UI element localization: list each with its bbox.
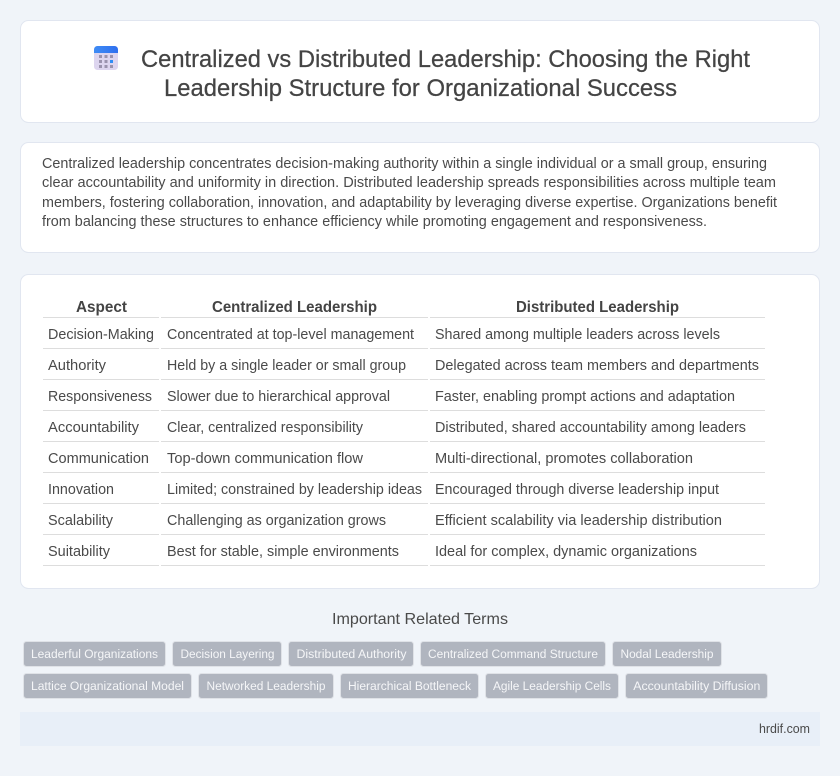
panel: introduction bbox=[20, 142, 820, 252]
row: responsiveness: Slower due to hierarchical approval bbox=[167, 389, 390, 405]
row: authority bbox=[48, 358, 759, 374]
row: accountability bbox=[48, 420, 746, 436]
row: scalability bbox=[48, 513, 722, 529]
title: Centralized vs Distributed Leadership: Choosing the Right bbox=[141, 46, 750, 73]
tag: centralized command structure bbox=[420, 642, 606, 666]
row: scalability: Scalability bbox=[48, 513, 114, 529]
tag: centralized command structure: Centralized Command Structure bbox=[428, 647, 598, 661]
text block: introduction bbox=[42, 156, 777, 230]
row: authority: Held by a single leader or small group bbox=[167, 358, 406, 374]
row: communication: Communication bbox=[48, 451, 149, 467]
row: responsiveness: Responsiveness bbox=[48, 389, 152, 405]
tags: related terms bbox=[24, 642, 768, 698]
tag: lattice organizational model bbox=[24, 674, 192, 698]
table header row bbox=[76, 299, 679, 316]
row: communication bbox=[48, 451, 693, 467]
table header row: Distributed Leadership bbox=[516, 299, 679, 316]
row: accountability: Clear, centralized responsibility bbox=[167, 420, 364, 436]
row: responsiveness bbox=[48, 389, 735, 405]
text block: introduction: members, fostering collaboration, innovation, and adaptability by leveraging diverse expertise. Organizations benefit bbox=[42, 195, 777, 211]
footer source: hrdif.com bbox=[759, 721, 810, 736]
tag: leaderful organizations bbox=[24, 642, 166, 666]
row: suitability: Best for stable, simple environments bbox=[167, 544, 399, 560]
row: scalability: Challenging as organization grows bbox=[167, 513, 386, 529]
icon: calendar bbox=[94, 46, 118, 70]
row: innovation: Encouraged through diverse leadership input bbox=[435, 482, 719, 498]
tag: decision layering bbox=[172, 642, 282, 666]
panel: header bbox=[20, 20, 820, 122]
row: innovation: Limited; constrained by leadership ideas bbox=[167, 482, 422, 498]
text block: introduction: clear accountability and uniformity in direction. Distributed leadership spreads responsibilities across multiple team bbox=[42, 175, 776, 191]
row: accountability: Distributed, shared accountability among leaders bbox=[435, 420, 746, 436]
row: decision-making bbox=[48, 327, 720, 343]
tag: agile leadership cells: Agile Leadership Cells bbox=[493, 679, 611, 693]
tag: agile leadership cells bbox=[486, 674, 618, 698]
text block: introduction: Centralized leadership concentrates decision-making authority within a single individual or a small group, ensuring bbox=[42, 156, 767, 172]
row: accountability: Accountability bbox=[48, 420, 140, 436]
title: Leadership Structure for Organizational Success bbox=[164, 75, 677, 102]
row: suitability bbox=[48, 544, 697, 560]
tag: accountability diffusion bbox=[626, 674, 768, 698]
row: decision-making: Decision-Making bbox=[48, 327, 154, 343]
tag: lattice organizational model: Lattice Organizational Model bbox=[31, 679, 184, 693]
row: communication: Top-down communication flow bbox=[167, 451, 364, 467]
row: decision-making: Shared among multiple leaders across levels bbox=[435, 327, 720, 343]
row: innovation: Innovation bbox=[48, 482, 114, 498]
tag: distributed authority: Distributed Authority bbox=[296, 647, 407, 661]
title bbox=[141, 46, 750, 102]
row: scalability: Efficient scalability via leadership distribution bbox=[435, 513, 722, 529]
row: decision-making: Concentrated at top-level management bbox=[167, 327, 414, 343]
heading: important related terms: Important Related Terms bbox=[332, 611, 508, 628]
tag: hierarchical bottleneck bbox=[340, 674, 478, 698]
tag: networked leadership: Networked Leadership bbox=[206, 679, 326, 693]
tag: hierarchical bottleneck: Hierarchical Bottleneck bbox=[348, 679, 472, 693]
tag: nodal leadership bbox=[612, 642, 722, 666]
row: communication: Multi-directional, promotes collaboration bbox=[435, 451, 693, 467]
text block: introduction: from balancing these structures to enhance efficiency while promoting engagement and responsiveness. bbox=[42, 214, 707, 230]
row: authority: Authority bbox=[48, 358, 107, 374]
tag: networked leadership bbox=[198, 674, 334, 698]
tag: decision layering: Decision Layering bbox=[180, 647, 274, 661]
table header row: Aspect bbox=[76, 299, 128, 316]
table header row: Centralized Leadership bbox=[212, 299, 377, 316]
panel: comparison table bbox=[20, 274, 820, 588]
row: innovation bbox=[48, 482, 719, 498]
row: suitability: Ideal for complex, dynamic organizations bbox=[435, 544, 697, 560]
row: authority: Delegated across team members and departments bbox=[435, 358, 759, 374]
tag: accountability diffusion: Accountability Diffusion bbox=[633, 679, 760, 693]
tag: leaderful organizations: Leaderful Organizations bbox=[31, 647, 158, 661]
footer bbox=[20, 712, 820, 746]
tag: distributed authority bbox=[288, 642, 414, 666]
row: suitability: Suitability bbox=[48, 544, 111, 560]
tag: nodal leadership: Nodal Leadership bbox=[620, 647, 714, 661]
row: responsiveness: Faster, enabling prompt actions and adaptation bbox=[435, 389, 735, 405]
